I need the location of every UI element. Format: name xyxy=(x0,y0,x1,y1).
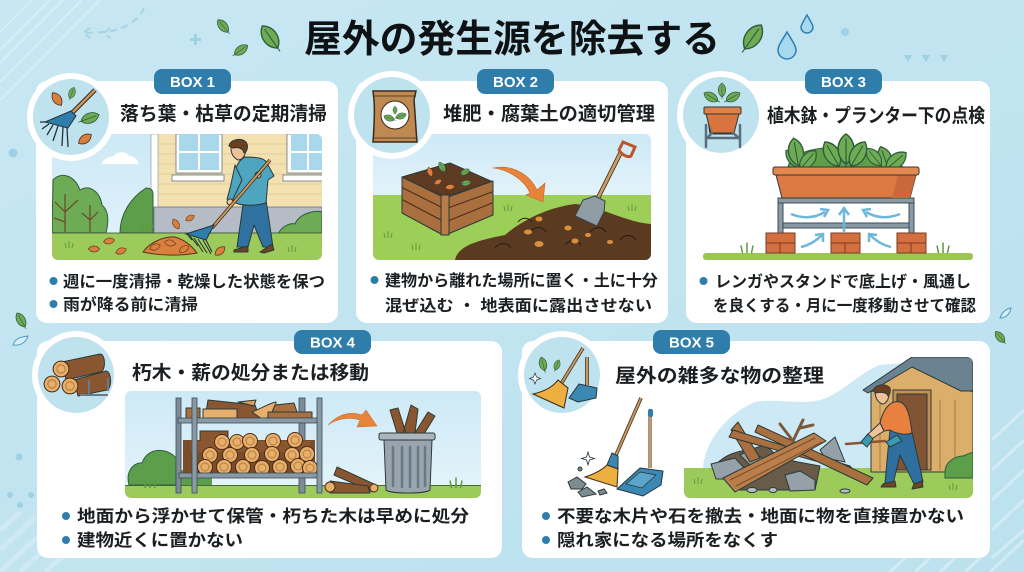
illustration: clearing debris by shed xyxy=(684,357,973,498)
debris pile xyxy=(711,420,873,493)
house xyxy=(151,134,323,233)
badge: box 3 xyxy=(805,69,882,94)
badge: box 2: BOX 2 xyxy=(493,74,538,91)
badge: box 2 xyxy=(477,69,554,94)
badge: box 1: BOX 1 xyxy=(170,74,215,91)
arrow xyxy=(493,167,545,202)
illustration: raised planter with airflow xyxy=(703,134,973,260)
badge: box 5 xyxy=(653,330,730,354)
bullet text: box 2 xyxy=(370,272,658,315)
bullet text: box 2: 混ぜ込む ・ 地表面に露出させない xyxy=(385,297,652,315)
panel: box 1 xyxy=(27,69,338,323)
bullet text: box 4: 地面から浮かせて保管・朽ちた木は早めに処分 xyxy=(77,506,469,526)
rack shelves and front posts xyxy=(178,398,322,493)
icon: potted plant on stand xyxy=(677,71,765,159)
shovel xyxy=(575,142,635,226)
badge: box 1 xyxy=(154,69,231,94)
man with shovel xyxy=(846,385,923,489)
icon: stacked logs xyxy=(32,331,120,419)
panel: box 5 xyxy=(518,330,990,558)
illustration: compost box and soil pile xyxy=(373,134,651,260)
icon: compost bag xyxy=(348,71,436,159)
panel: box 2 xyxy=(348,69,668,323)
bush xyxy=(128,450,176,485)
badge: box 4: BOX 4 xyxy=(310,334,356,352)
decorative stripes bottom right xyxy=(890,410,1024,572)
panel: box 4 xyxy=(32,330,502,558)
bullet text: box 3: レンガやスタンドで底上げ・風通し xyxy=(715,273,971,291)
top shelf logs xyxy=(186,400,312,419)
decorative stripes top left xyxy=(0,0,100,100)
trash bin xyxy=(379,405,435,493)
bullet text: box 3: を良くする・月に一度移動させて確認 xyxy=(713,296,976,315)
decorative stripes bottom left xyxy=(0,512,75,572)
bullet text: box 3 xyxy=(700,273,976,315)
bullet text: box 1: 雨が降る前に清掃 xyxy=(63,295,198,314)
rake xyxy=(186,160,270,254)
foliage xyxy=(782,134,910,177)
leaf pile xyxy=(88,213,227,258)
heading: box 1: 落ち葉・枯草の定期清掃 xyxy=(120,102,327,125)
planter xyxy=(773,167,919,198)
water drops xyxy=(778,15,813,59)
icon: rake and leaves xyxy=(27,73,115,161)
compost box xyxy=(402,161,493,235)
stand xyxy=(778,198,914,233)
airflow arrows xyxy=(791,208,900,247)
title: 屋外の発生源を除去する xyxy=(304,19,720,61)
badge: box 4 xyxy=(294,330,371,354)
bullet text: box 4 xyxy=(62,506,469,550)
badge: box 3: BOX 3 xyxy=(821,74,866,91)
lower shelf logs xyxy=(183,431,318,476)
bullet text: box 5: 不要な木片や石を撤去・地面に物を直接置かない xyxy=(557,507,964,526)
soil pile xyxy=(455,204,651,260)
heading: box 2: 堆肥・腐葉土の適切管理 xyxy=(443,102,655,125)
man xyxy=(227,139,274,253)
illustration: firewood rack and trash bin xyxy=(125,391,481,498)
bushes xyxy=(52,174,322,233)
bullet text: box 4: 建物近くに置かない xyxy=(77,531,243,550)
panel: box 3 xyxy=(677,69,990,323)
bullet text: box 1 xyxy=(50,272,325,314)
arrow xyxy=(328,410,377,427)
bullet text: box 2: 建物から離れた場所に置く・土に十分 xyxy=(385,272,658,290)
bullet text: box 5: 隠れ家になる場所をなくす xyxy=(557,530,778,550)
heading: box 3: 植木鉢・プランター下の点検 xyxy=(767,105,985,127)
dashed arrow decoration xyxy=(83,8,144,38)
bricks xyxy=(766,233,926,253)
badge: box 5: BOX 5 xyxy=(669,334,714,352)
bullet text: box 1: 週に一度清掃・乾燥した状態を保つ xyxy=(63,272,325,291)
bullet text: box 5 xyxy=(542,507,964,550)
rack back posts xyxy=(176,398,305,493)
decorative dots and marks xyxy=(7,28,948,508)
logs on ground xyxy=(325,467,378,493)
icon: broom and dustpan xyxy=(518,331,606,419)
top leaves decoration xyxy=(13,17,1011,346)
illustration: broom and dustpan xyxy=(568,398,663,497)
shed xyxy=(863,357,973,472)
heading: box 5: 屋外の雑多な物の整理 xyxy=(615,365,824,387)
heading: box 4: 朽木・薪の処分または移動 xyxy=(132,362,369,384)
illustration: man raking leaves xyxy=(52,134,323,260)
